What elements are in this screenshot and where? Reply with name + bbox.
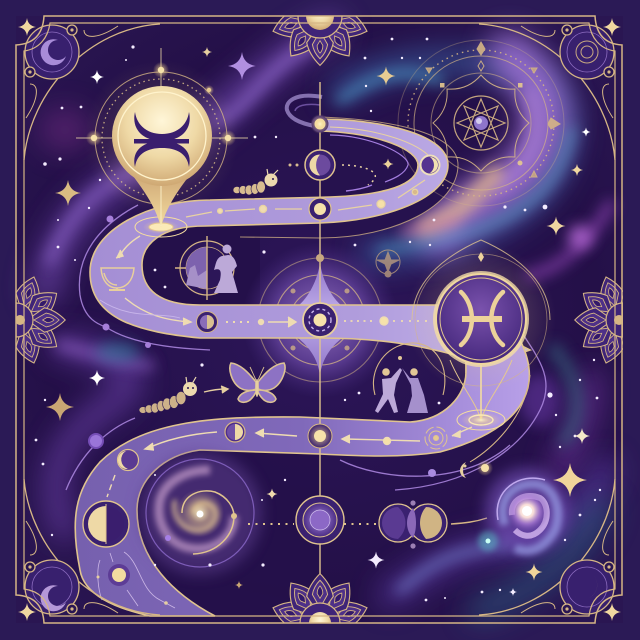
moon in corner: bottom right: [574, 574, 597, 599]
links around double moon: [344, 523, 376, 525]
sparkle: gold: [18, 18, 36, 36]
axis node: small above center: [316, 254, 324, 262]
icon: couple: [373, 343, 445, 413]
sparkle: lilac: [228, 52, 256, 80]
lotus ornament: bottom: [272, 573, 368, 622]
axis node: [309, 198, 331, 220]
sparkle: white right side: [574, 428, 590, 444]
icon: constellation glyph: [376, 250, 400, 277]
sparkle: gold low: [266, 488, 278, 500]
icon: concentric circle on lower band: [425, 427, 447, 449]
left pisces pin: [76, 48, 248, 237]
sparkle: white bottom: [368, 552, 384, 568]
moon on first band: [420, 156, 440, 174]
arrow: caterpillar to butterfly: [204, 386, 228, 393]
moon on middle band: [196, 312, 218, 332]
axis node: moon phase: [305, 150, 335, 180]
moon in corner: top left: [41, 39, 66, 65]
ribbon arrows: middle band: [100, 236, 430, 327]
sparkle: gold upper: [376, 66, 396, 86]
corner ornament: bottom right: [479, 479, 615, 615]
sparkle: gold right lower: [546, 216, 566, 236]
sparkle: outlined gold: [55, 180, 81, 206]
sparkle: white left: [89, 370, 105, 386]
icon: top caterpillar: [233, 169, 278, 195]
lotus ornament: right: [574, 276, 623, 364]
icon: bowl: [101, 268, 134, 290]
sparkle: gold small low: [235, 581, 243, 589]
sparkle: brown left: [46, 393, 74, 421]
sparkle: gold small: [202, 47, 212, 57]
dotted link to center: [248, 523, 294, 525]
orbit lines: [66, 205, 546, 490]
lotus ornament: top: [272, 16, 368, 66]
glow behind center: [242, 242, 398, 398]
small white stars: [35, 38, 601, 601]
ribbon marks: top band: [186, 127, 428, 217]
decorative rings behind center node: [258, 258, 382, 382]
icon: figure and half moon: [175, 236, 238, 300]
rings in corner: top right: [576, 41, 598, 63]
dark interior of galaxy loop: [137, 450, 320, 616]
constellation mandala: [398, 40, 564, 206]
moon: half on lower band: [225, 422, 245, 442]
sparkle: big gold: [553, 463, 587, 497]
vertical axis line: [319, 82, 321, 612]
sparkle: gold right: [571, 164, 583, 176]
corner ornament: bottom left: [24, 479, 160, 615]
icon: pisces glyph gold: [461, 292, 503, 345]
corner ornament: top left: [24, 24, 160, 160]
right pisces pin: [406, 240, 556, 430]
icon: double moon: [379, 500, 447, 549]
icon: pisces glyph dark: [134, 112, 190, 167]
axis node: [308, 424, 332, 448]
crescent and gold node below band: [428, 375, 530, 478]
arrow to right spiral: [451, 518, 487, 524]
sparkle: gold in loop: [382, 158, 394, 170]
dots toward moon: [288, 164, 298, 166]
sparkle: white right: [582, 128, 590, 136]
ribbon path: upper section: [90, 119, 530, 372]
icon: lower caterpillar: [139, 377, 197, 413]
sparkle: gold bottom: [526, 564, 542, 580]
sparkle: white bottom small: [509, 588, 517, 596]
moon in corner: bottom left: [41, 585, 66, 611]
moon: large half on lower band: [83, 501, 129, 547]
moon: crescent on lower band: [118, 450, 138, 470]
lotus ornament: left: [16, 276, 66, 364]
central lens: [298, 262, 342, 376]
dark halo around upper loop: [320, 117, 458, 238]
icon: gold spiral galaxy: [138, 451, 262, 575]
sparkle: white: [90, 70, 104, 84]
icon: violet spiral galaxy: [478, 468, 569, 552]
sparkle: gold: [603, 603, 621, 621]
dashed orbit in upper loop: [330, 135, 408, 191]
ribbon path: lower section: [75, 340, 529, 616]
ribbon arrows: lower band: [107, 427, 472, 497]
axis node: [310, 114, 330, 134]
axis node: center: [303, 303, 337, 337]
sparkle: gold: [603, 18, 621, 36]
outer halo line around ribbon: [240, 117, 458, 238]
dark interior of left loop: [142, 226, 260, 305]
sparkle: gold: [18, 603, 36, 621]
curl at top of ribbon: [287, 96, 322, 127]
icon: butterfly: [230, 363, 285, 402]
corner ornament: top right: [479, 24, 615, 160]
glowing dot on lower band: [96, 552, 175, 608]
axis node: lower violet: [296, 496, 344, 544]
